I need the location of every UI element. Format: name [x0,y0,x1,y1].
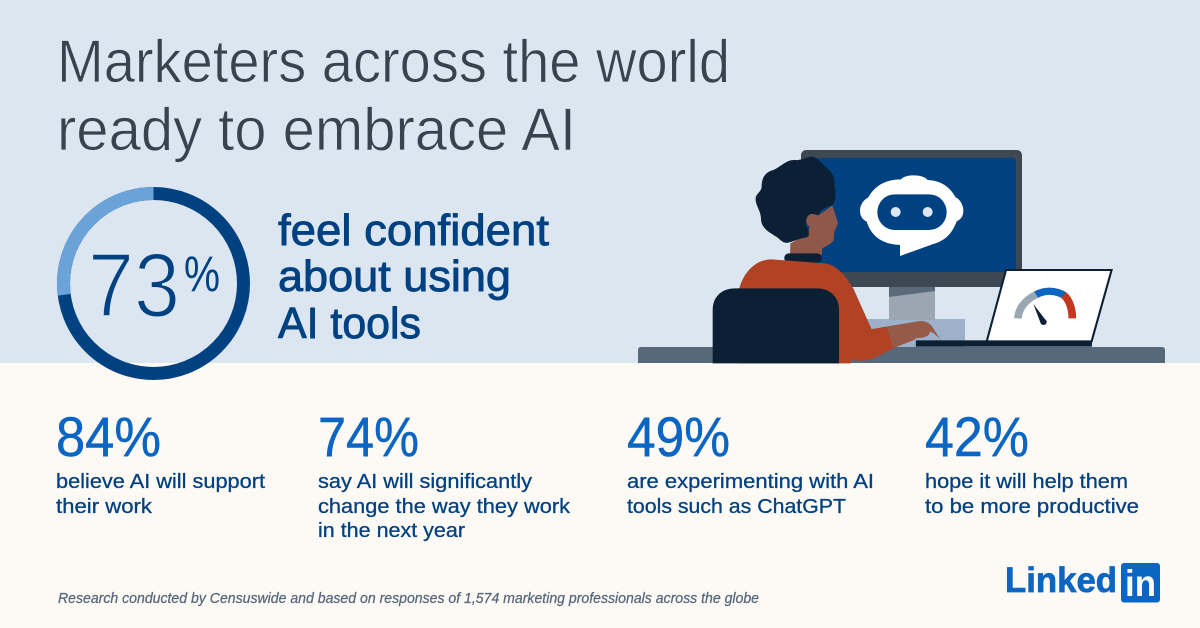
logo: LinkedIn: Linked [1005,561,1117,600]
ear [806,214,818,227]
title [57,28,730,163]
arm and hand [870,321,941,348]
title: Marketers across the world [57,28,730,95]
logo: LinkedIn: in [1125,563,1156,604]
panel: top background [0,0,1200,363]
neck and face [790,205,838,255]
statistic: 42%: 42% [925,405,1029,468]
statistic: 74%: in the next year [318,519,465,542]
body and chair [713,259,941,363]
monitor [801,150,1022,287]
statistic: 74% [318,405,571,542]
statistic: 84% [56,405,265,518]
statistic: 49%: tools such as ChatGPT [627,495,846,518]
headline statistic text: AI tools [278,299,421,348]
monitor stand [889,286,935,320]
person [713,157,941,363]
statistic: 74%: change the way they work [318,495,571,518]
statistic: 42%: hope it will help them [925,470,1128,493]
collar [784,253,822,263]
illustration: person at desk with AI chatbot monitor [638,150,1165,363]
statistic: 84%: 84% [56,405,161,468]
head and hair [756,157,838,263]
footnote: Research conducted by Censuswide and based on responses of 1,574 marketing professionals across the globe [58,591,759,607]
headline statistic text: about using [278,252,511,301]
monitor stand base [865,319,965,348]
statistic: 42% [925,405,1139,518]
hair [756,157,835,243]
headline statistic text: feel confident [278,206,549,255]
logo: LinkedIn [1005,561,1160,604]
donut value: % [184,246,220,302]
laptop [916,270,1112,347]
statistic: 84%: their work [56,495,153,518]
sweater [739,259,893,363]
chair [713,288,839,363]
statistic: 49%: are experimenting with AI [627,470,874,493]
statistic: 49% [627,405,874,518]
donut value: 73 [88,236,180,336]
icon: chatbot [860,175,963,256]
donut chart: 73% [63,193,243,374]
statistic: 74%: 74% [318,405,419,468]
title: ready to embrace AI [57,96,576,163]
icon: gauge [1018,291,1072,325]
statistic: 42%: to be more productive [925,495,1139,518]
headline statistic text [278,206,549,348]
statistic: 49%: 49% [627,405,730,468]
desk [638,347,1165,363]
panel: bottom background [0,363,1200,628]
statistic: 74%: say AI will significantly [318,470,533,493]
statistic: 84%: believe AI will support [56,470,265,493]
